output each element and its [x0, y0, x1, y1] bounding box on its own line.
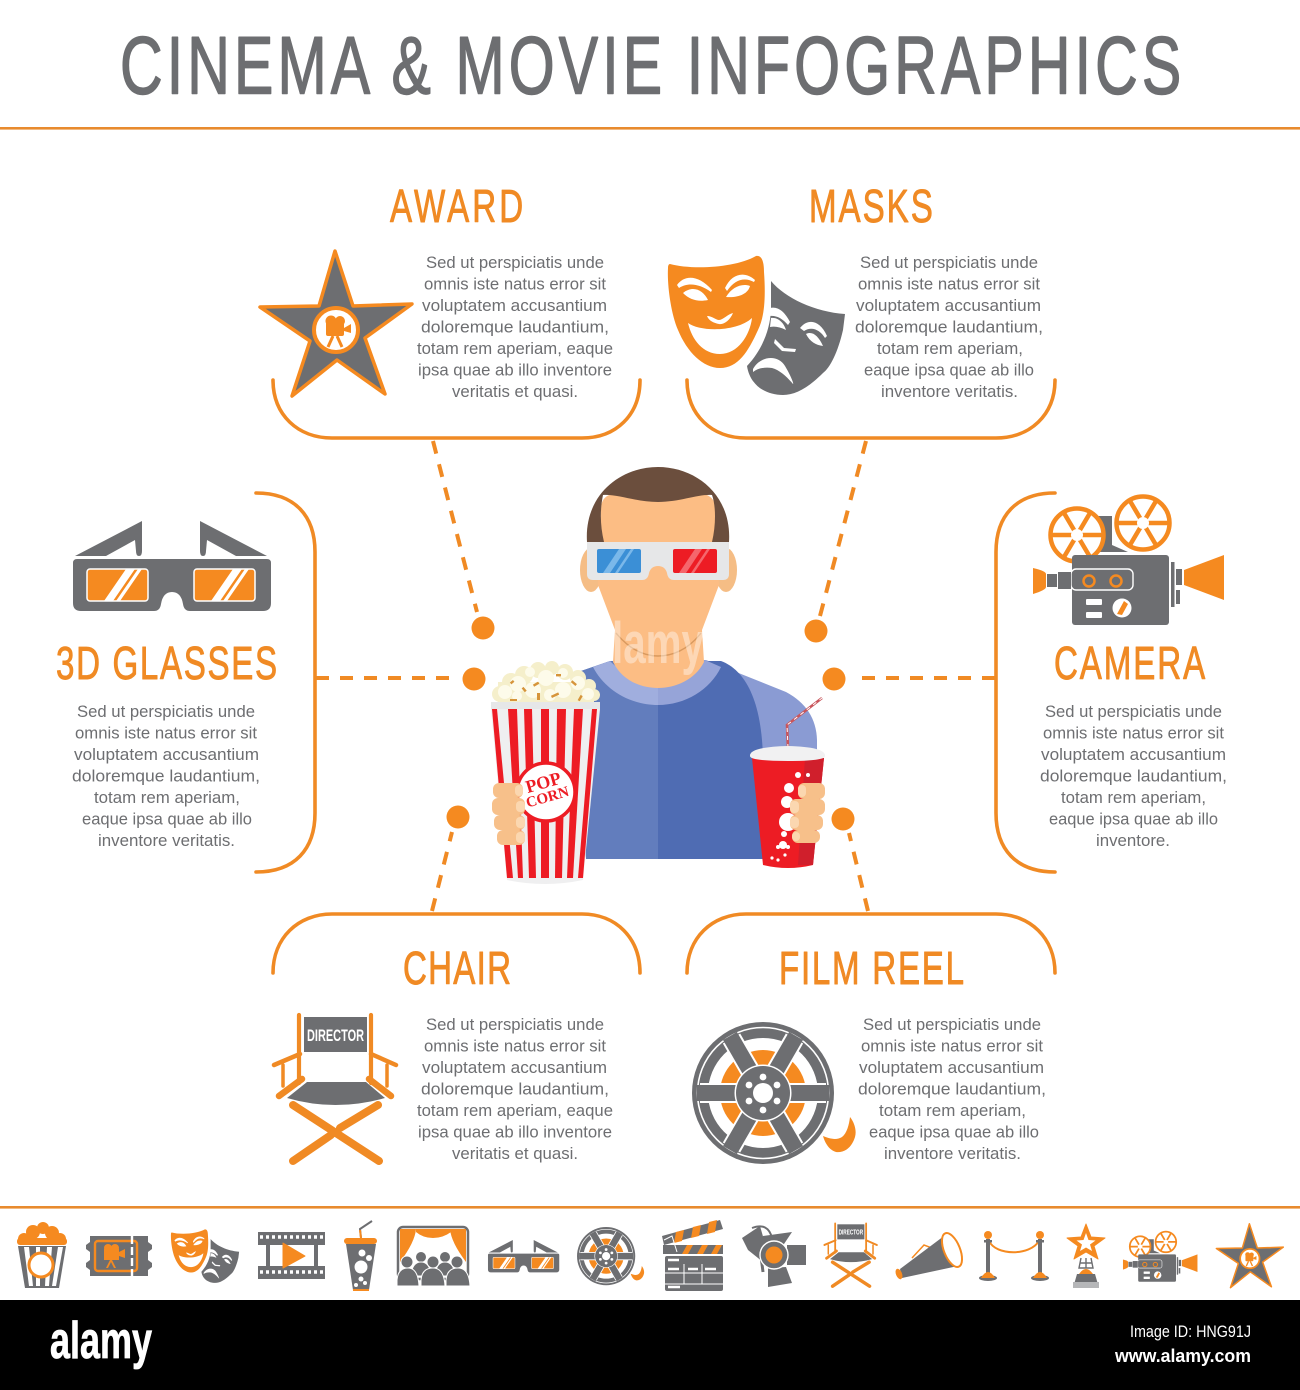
text block: 3d glasses	[72, 702, 260, 850]
title: CINEMA & MOVIE INFOGRAPHICS	[120, 20, 1181, 112]
icon: film camera small	[1123, 1232, 1197, 1282]
panel: chair	[273, 914, 640, 1163]
popcorn label: POP	[523, 768, 563, 797]
text block: award: omnis iste natus error sit	[424, 274, 606, 294]
text block: masks: eaque ipsa quae ab illo	[864, 360, 1034, 380]
popcorn label: CORN	[524, 784, 571, 812]
text block: film reel: inventore veritatis.	[884, 1144, 1021, 1163]
icon: star trophy	[1067, 1224, 1105, 1288]
text block: camera: doloremque laudantium,	[1040, 766, 1227, 786]
icon: award star	[260, 251, 412, 396]
footer logo: alamy	[50, 1312, 152, 1370]
text block: film reel: eaque ipsa quae ab illo	[869, 1122, 1039, 1142]
panel: film reel	[687, 914, 1055, 1164]
icon: theatre audience	[397, 1227, 470, 1286]
text block: masks: doloremque laudantium,	[855, 318, 1043, 336]
icon: theatre masks	[668, 256, 845, 395]
text block: award: totam rem aperiam, eaque	[417, 339, 613, 358]
text block: camera: voluptatem accusantium	[1041, 745, 1226, 764]
footer bar	[0, 1300, 1300, 1390]
text block: film reel	[858, 1015, 1046, 1163]
icon: ticket	[86, 1236, 152, 1276]
text block: camera: inventore.	[1096, 831, 1170, 850]
soda cup	[750, 698, 825, 868]
text block: award	[417, 253, 613, 401]
text block: 3d glasses: inventore veritatis.	[98, 831, 235, 850]
central figure: man with 3d glasses	[491, 467, 825, 884]
panel: 3d glasses	[56, 493, 315, 872]
text block: camera: omnis iste natus error sit	[1043, 724, 1224, 742]
text block: film reel: totam rem aperiam,	[879, 1101, 1026, 1120]
text block: chair	[417, 1015, 613, 1163]
text block: chair: ipsa quae ab illo inventore	[418, 1122, 612, 1142]
text block: 3d glasses: Sed ut perspiciatis unde	[77, 702, 255, 721]
text block: chair: doloremque laudantium,	[421, 1080, 609, 1098]
text block: masks: voluptatem accusantium	[856, 296, 1041, 315]
icon: popcorn	[17, 1222, 67, 1288]
text block: film reel: voluptatem accusantium	[859, 1058, 1044, 1077]
text block: masks: totam rem aperiam,	[877, 339, 1023, 358]
icon: film reel	[692, 1022, 856, 1164]
text block: chair: Sed ut perspiciatis unde	[426, 1015, 604, 1034]
icon: film camera	[1033, 496, 1224, 625]
panel: masks	[668, 182, 1055, 438]
bucket	[491, 709, 600, 884]
icon: film reel small	[577, 1227, 644, 1285]
text block: 3d glasses: totam rem aperiam,	[94, 788, 240, 807]
right hand	[790, 783, 825, 843]
popcorn bucket	[491, 661, 600, 884]
icon: 3d glasses	[73, 521, 271, 611]
bracket: film reel	[687, 914, 1055, 973]
icon: film strip	[258, 1232, 325, 1279]
text block: chair: veritatis et quasi.	[452, 1144, 578, 1163]
sweater	[578, 660, 817, 859]
icon: 3d glasses small	[488, 1240, 559, 1272]
text block: masks: inventore veritatis.	[881, 382, 1018, 401]
ears	[580, 548, 602, 592]
text block: chair: totam rem aperiam, eaque	[417, 1101, 613, 1120]
heading: 3d glasses: 3D GLASSES	[56, 639, 277, 689]
text block: masks: Sed ut perspiciatis unde	[860, 253, 1038, 272]
text block: award: veritatis et quasi.	[452, 382, 578, 401]
icon: spotlight	[742, 1226, 806, 1287]
face and neck	[598, 490, 719, 688]
left hand	[492, 783, 525, 845]
icon: megaphone	[894, 1230, 966, 1280]
text block: 3d glasses: eaque ipsa quae ab illo	[82, 810, 252, 828]
text block: masks: omnis iste natus error sit	[858, 274, 1040, 294]
icon: director chair small	[824, 1223, 877, 1286]
text block: chair: voluptatem accusantium	[422, 1058, 607, 1077]
text block: award: Sed ut perspiciatis unde	[426, 253, 604, 272]
heading: chair: CHAIR	[403, 944, 511, 994]
icon: masks small	[171, 1229, 239, 1283]
bracket: award	[273, 380, 640, 438]
popcorn	[492, 661, 600, 702]
text block: camera: totam rem aperiam,	[1061, 788, 1206, 807]
icon: director chair	[274, 1015, 396, 1161]
icon: clapperboard	[662, 1220, 723, 1291]
bracket: masks	[687, 380, 1055, 438]
bracket: chair	[273, 914, 640, 973]
watermark: lamy	[612, 611, 704, 676]
heading: award: AWARD	[390, 182, 523, 232]
text block: chair: omnis iste natus error sit	[424, 1036, 606, 1056]
text block: 3d glasses: omnis iste natus error sit	[75, 724, 257, 742]
bracket: 3d glasses	[256, 493, 315, 872]
icon: rope barrier	[979, 1231, 1049, 1281]
text block: award: voluptatem accusantium	[422, 296, 607, 315]
icon strip	[0, 1206, 1300, 1291]
text block: film reel: omnis iste natus error sit	[861, 1036, 1043, 1056]
panel: award	[260, 182, 640, 438]
heading: film reel: FILM REEL	[779, 944, 964, 994]
text block: camera	[1040, 702, 1227, 850]
icon: soda cup	[344, 1221, 377, 1291]
footer image id: Image ID: HNG91J	[1130, 1322, 1251, 1341]
text block: 3d glasses: doloremque laudantium,	[72, 766, 260, 786]
bracket: camera	[996, 493, 1055, 872]
text block: award: ipsa quae ab illo inventore	[418, 360, 612, 380]
popcorn label	[517, 763, 575, 821]
text block: camera: Sed ut perspiciatis unde	[1045, 702, 1222, 721]
text block: film reel: Sed ut perspiciatis unde	[863, 1015, 1041, 1034]
icon: award star small	[1216, 1224, 1283, 1288]
3d glasses	[587, 542, 729, 580]
hair	[587, 467, 729, 542]
text block: film reel: doloremque laudantium,	[858, 1080, 1046, 1098]
heading: camera: CAMERA	[1054, 639, 1205, 689]
text block: masks	[855, 253, 1043, 401]
heading: masks: MASKS	[809, 182, 933, 232]
text block: 3d glasses: voluptatem accusantium	[74, 745, 259, 764]
footer url: www.alamy.com	[1114, 1346, 1251, 1366]
panel: camera	[996, 493, 1227, 872]
connectors: dashed lines and dots	[316, 441, 995, 911]
text block: camera: eaque ipsa quae ab illo	[1049, 810, 1218, 828]
text block: award: doloremque laudantium,	[421, 318, 609, 336]
